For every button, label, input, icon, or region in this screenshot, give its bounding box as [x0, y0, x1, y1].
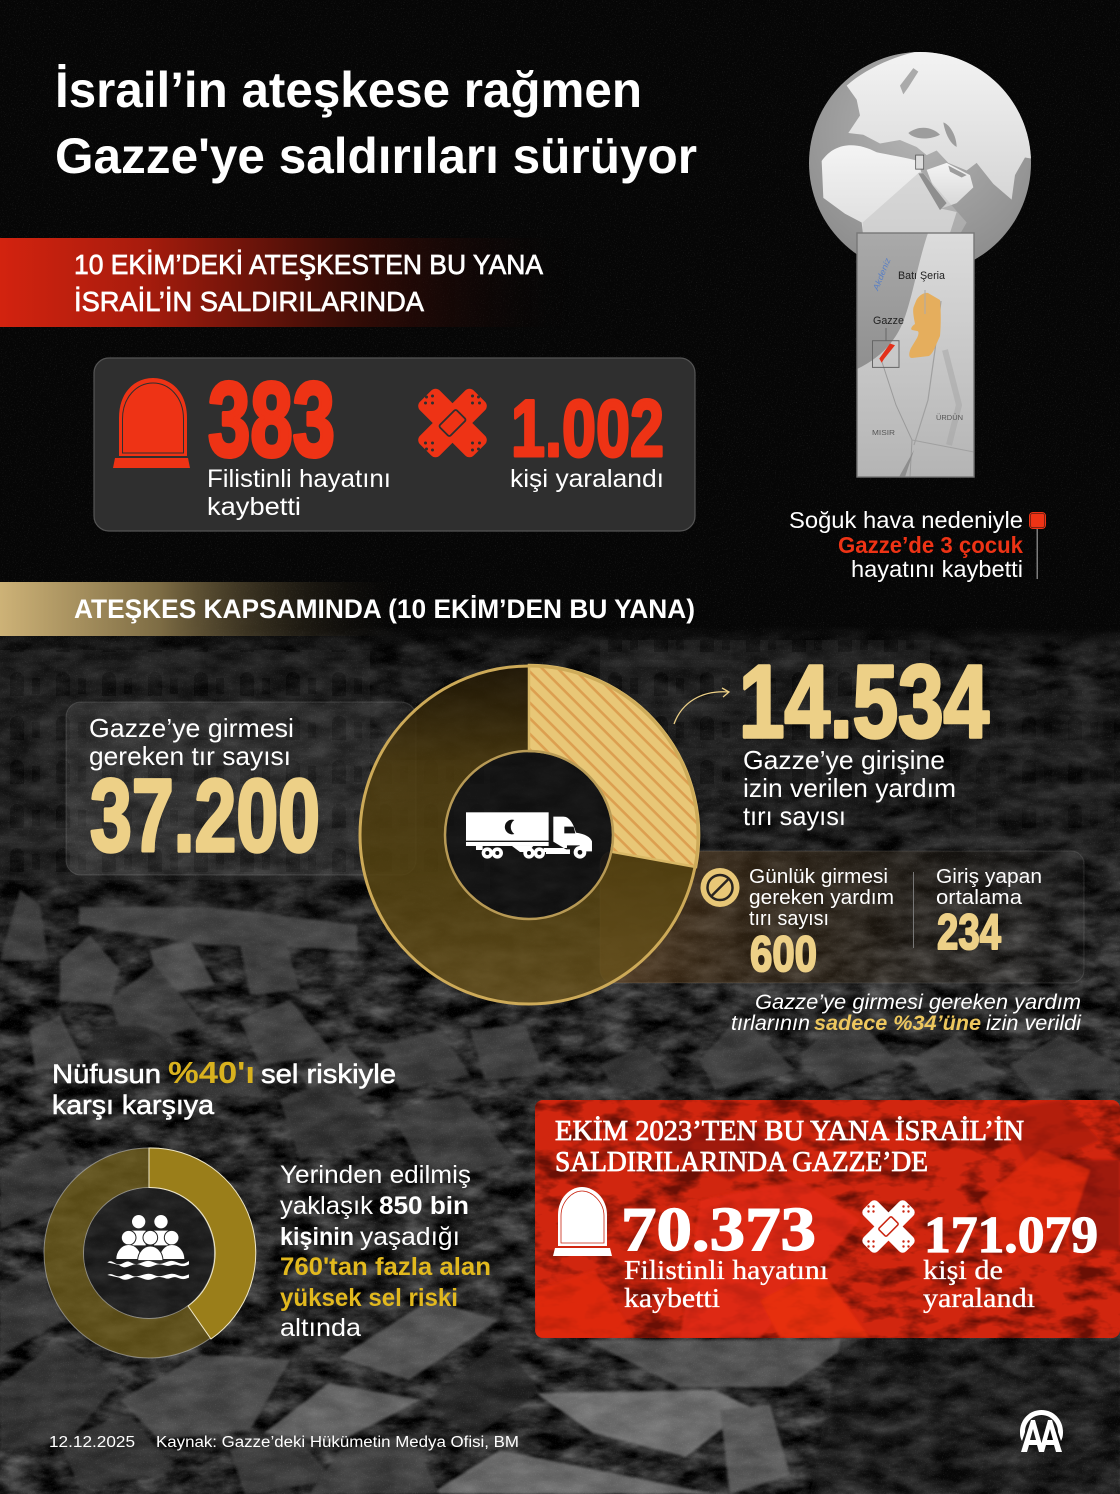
allowed trucks figure: 14.534	[739, 644, 989, 759]
tent camp and rubble	[0, 890, 1120, 1494]
flood risk text: yaklaşık	[280, 1192, 374, 1220]
map labels: Batı Şeria	[898, 270, 946, 282]
deaths caption	[624, 1255, 828, 1313]
ruined buildings	[0, 640, 1120, 890]
footer: date: 12.12.2025	[49, 1434, 135, 1451]
note: only 34 percent allowed	[731, 991, 1082, 1035]
1.002 number: 1.002	[511, 384, 664, 474]
daily needed text	[749, 866, 894, 930]
arrow to allowed trucks figure	[674, 688, 729, 724]
panel heading: EKİM 2023’TEN BU YANA İSRAİL’İN	[555, 1116, 1024, 1147]
panel: trucks required: Gazze’ye girmesi	[89, 713, 294, 743]
note: only 34 percent allowed: izin verildi	[986, 1012, 1082, 1035]
banner: since 10 October ceasefire: 10 EKİM’DEKİ ATEŞKESTEN BU YANA	[74, 249, 543, 280]
injuries caption: yaralandı	[923, 1283, 1035, 1313]
deaths caption: kaybetti	[624, 1283, 720, 1313]
icon: people in flood	[107, 1215, 189, 1280]
flood risk text: yüksek sel riski	[280, 1284, 458, 1312]
flood risk text: Yerinden edilmiş	[280, 1161, 471, 1189]
deaths caption	[207, 465, 391, 521]
note: only 34 percent allowed: sadece %34’üne	[814, 1012, 981, 1035]
panel: trucks required: gereken tır sayısı	[89, 741, 291, 771]
note: only 34 percent allowed: tırlarının	[731, 1012, 810, 1035]
panel: trucks required: 37.200	[90, 758, 320, 873]
panel: trucks required	[66, 702, 416, 875]
flood risk text	[280, 1161, 491, 1342]
panel: totals since October 2023	[535, 1100, 1120, 1338]
icon: white bandage	[860, 1198, 917, 1255]
panel: recent deaths and injuries	[94, 358, 695, 531]
70.373 number: 70.373	[621, 1196, 816, 1264]
callout: children lost to cold: hayatını kaybetti	[851, 556, 1023, 582]
map labels: ÜRDÜN	[936, 413, 963, 422]
heading: flood risk: Nüfusun	[52, 1059, 161, 1089]
title	[55, 62, 697, 184]
banner: since 10 October ceasefire: İSRAİL’İN SALDIRILARINDA	[74, 286, 424, 317]
deaths caption: kaybetti	[207, 493, 301, 521]
callout: children lost to cold	[789, 507, 1046, 582]
icon: truck	[466, 812, 592, 859]
deaths caption: Filistinli hayatını	[207, 465, 391, 493]
171.079 number: 171.079	[924, 1207, 1098, 1264]
heading: flood risk	[52, 1055, 396, 1120]
donut chart: trucks allowed share	[359, 665, 699, 1005]
flood risk text: kişinin	[280, 1223, 354, 1251]
sea: Akdeniz	[857, 233, 928, 369]
average entering text: ortalama	[936, 887, 1023, 909]
600 number: 600	[750, 926, 817, 982]
daily needed text: Günlük girmesi	[749, 866, 888, 888]
flood risk text: 850 bin	[379, 1192, 469, 1220]
injuries caption: kişi yaralandı	[510, 465, 664, 493]
icon: bandage	[416, 386, 489, 460]
flood risk text: altında	[280, 1314, 361, 1342]
allowed trucks figure: Gazze’ye girişine	[743, 745, 945, 775]
injuries caption: kişi de	[923, 1255, 1003, 1285]
icon: white gravestone	[553, 1187, 612, 1256]
title: İsrail’in ateşkese rağmen	[55, 62, 642, 118]
heading: flood risk: karşı karşıya	[52, 1090, 215, 1120]
map labels: MISIR	[872, 428, 896, 437]
Gaza strip shape	[879, 344, 895, 363]
flood risk text: yaşadığı	[360, 1223, 460, 1251]
heading: flood risk: %40'ı	[168, 1055, 255, 1090]
allowed trucks figure: tırı sayısı	[743, 801, 846, 831]
banner: since 10 October ceasefire	[0, 238, 570, 327]
logo: AA	[1020, 1410, 1063, 1452]
land masses	[847, 47, 1037, 200]
allowed segment	[529, 665, 699, 867]
allowed trucks figure	[739, 644, 989, 831]
383 number: 383	[208, 361, 335, 479]
deaths caption: Filistinli hayatını	[624, 1255, 828, 1285]
note: only 34 percent allowed: Gazze’ye girmesi gereken yardım	[755, 991, 1081, 1014]
average entering text	[936, 866, 1042, 909]
map labels: Gazze	[873, 315, 904, 327]
West Bank shape	[909, 293, 941, 358]
Gaza inset box	[872, 341, 899, 367]
banner: under the ceasefire: ATEŞKES KAPSAMINDA (10 EKİM’DEN BU YANA)	[74, 594, 695, 624]
daily needed text: gereken yardım	[749, 887, 894, 909]
allowed trucks figure: izin verilen yardım	[743, 773, 956, 803]
title: Gazze'ye saldırıları sürüyor	[55, 128, 697, 184]
daily needed text: tırı sayısı	[749, 908, 829, 930]
40 percent segment	[149, 1148, 256, 1339]
234 number: 234	[937, 904, 1001, 960]
icon: prohibited sign	[700, 868, 740, 907]
panel: daily truck figures	[600, 851, 1084, 983]
panel heading	[555, 1116, 1024, 1178]
icon: gravestone	[113, 378, 190, 468]
flood risk text: 760'tan fazla alan	[280, 1253, 491, 1281]
locator globe	[809, 52, 1031, 260]
footer: source: Kaynak: Gazze’deki Hükümetin Medya Ofisi, BM	[156, 1434, 519, 1451]
heading: flood risk: sel riskiyle	[261, 1059, 396, 1089]
callout: children lost to cold: Soğuk hava nedeniyle	[789, 507, 1023, 533]
injuries caption	[923, 1255, 1035, 1313]
map labels	[870, 256, 963, 437]
average entering text: Giriş yapan	[936, 866, 1042, 888]
panel heading: SALDIRILARINDA GAZZE’DE	[555, 1147, 928, 1178]
donut chart: population at flood risk	[44, 1148, 256, 1358]
map of Gaza and West Bank	[857, 233, 974, 477]
map labels: Akdeniz	[870, 256, 893, 293]
banner: under the ceasefire	[0, 582, 695, 636]
callout: children lost to cold: Gazze’de 3 çocuk	[838, 532, 1023, 558]
